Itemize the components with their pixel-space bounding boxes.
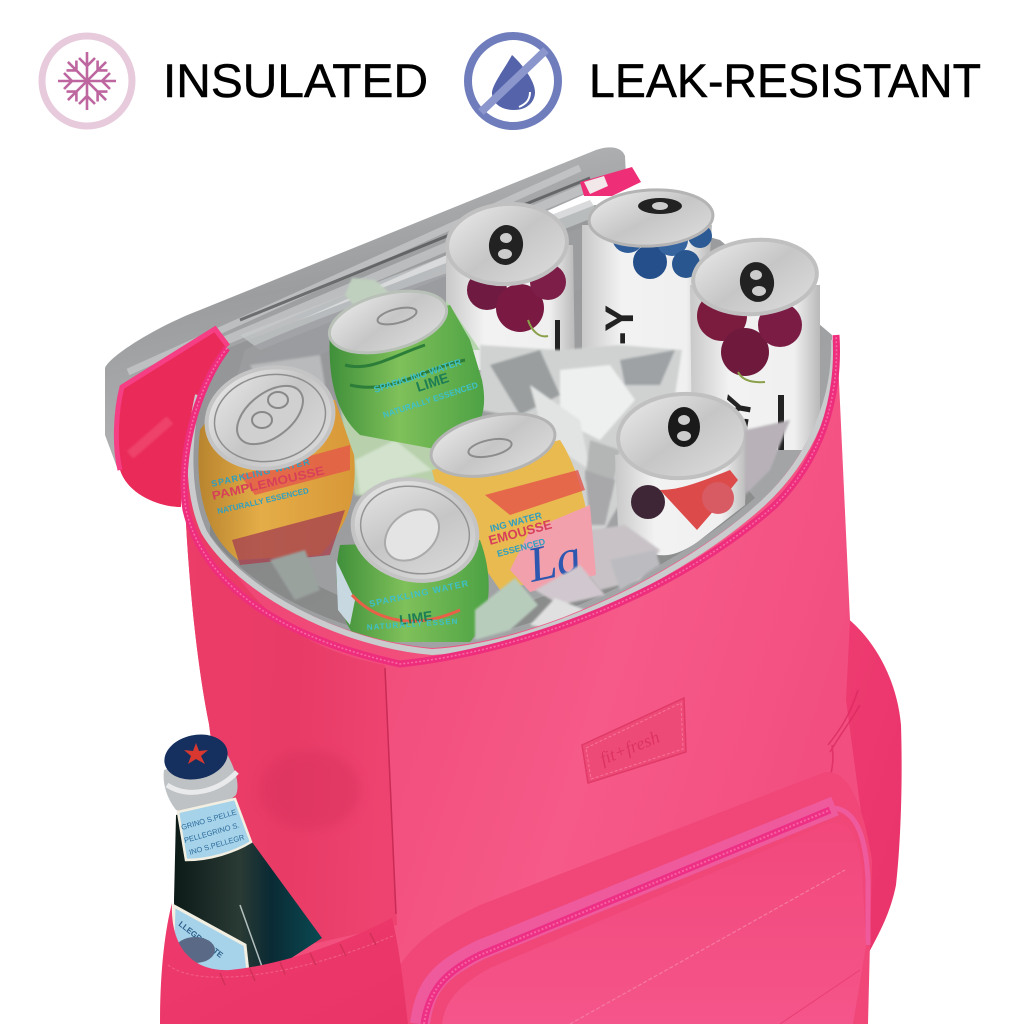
neck label: GRINO S.PELLE [180,808,237,832]
can: pamplemousse middle: La [522,527,586,593]
can: pamplemousse middle: ING WATER [489,510,543,535]
bottle [160,729,322,985]
bottle glass [174,798,322,985]
can: lime back: LIME [414,369,451,395]
can: lime front: LIME [398,607,434,628]
main label [172,906,248,972]
ice pile centre [479,344,682,530]
can: blueberry [582,187,714,400]
can: cherry back [444,200,575,370]
can: berry [615,390,749,562]
heading: leak-resistant: LEAK-RESISTANT [589,54,981,107]
can: lime back [323,280,484,450]
neck label: PELLEGRINO S. [183,821,240,845]
main label: LLEGRINO TE [177,919,225,960]
can: pamplemousse left [197,356,355,565]
bottle cap [160,729,232,785]
can: cherry right [690,235,820,450]
icon: snowflake in circle [42,36,132,126]
can: pamplemousse middle: EMOUSSE [487,516,554,548]
neck label: INO S.PELLEGR [188,832,246,857]
can: pamplemousse left: PAMPLEMOUSSE [211,463,326,503]
ice right side [580,420,790,590]
heading: insulated: INSULATED [163,54,428,107]
neck label [178,799,251,860]
can: lime back: SPARKLING WATER [373,357,463,396]
ice foreground [270,550,660,640]
can: pamplemousse middle: ESSENCED [496,536,547,559]
lid: pink flap [116,329,228,507]
lid: silver lining [105,147,626,470]
neck collar [164,752,238,812]
can: pamplemousse middle [425,404,596,593]
logo patch: fit+fresh [597,727,662,769]
ice around left [250,277,437,496]
can: lime front: NATURALLY ESSEN [367,617,459,632]
logo patch [582,698,686,783]
left side pocket [160,903,408,1024]
front pocket panel [442,823,866,1024]
bag body [183,360,870,1024]
gathers on right side [825,690,860,790]
metal rim [190,340,834,652]
can: lime back: NATURALLY ESSENCED [382,380,479,420]
lid: pink tab [580,167,641,196]
icon: no water drop [468,36,558,126]
can: pamplemousse left: NATURALLY ESSENCED [216,486,310,516]
side pocket right [780,617,902,1024]
main zipper [184,335,836,664]
can: pamplemousse left: SPARKLING WATER [210,456,312,489]
front pocket flap [397,772,872,1024]
cooler interior [192,200,832,648]
can: blueberry: -Y [598,305,642,345]
can: lime front [336,466,489,642]
side panel [183,440,397,960]
can: lime front: SPARKLING WATER [368,578,470,609]
front pocket zipper [420,806,868,1024]
can: cherry right: LY [713,392,760,441]
